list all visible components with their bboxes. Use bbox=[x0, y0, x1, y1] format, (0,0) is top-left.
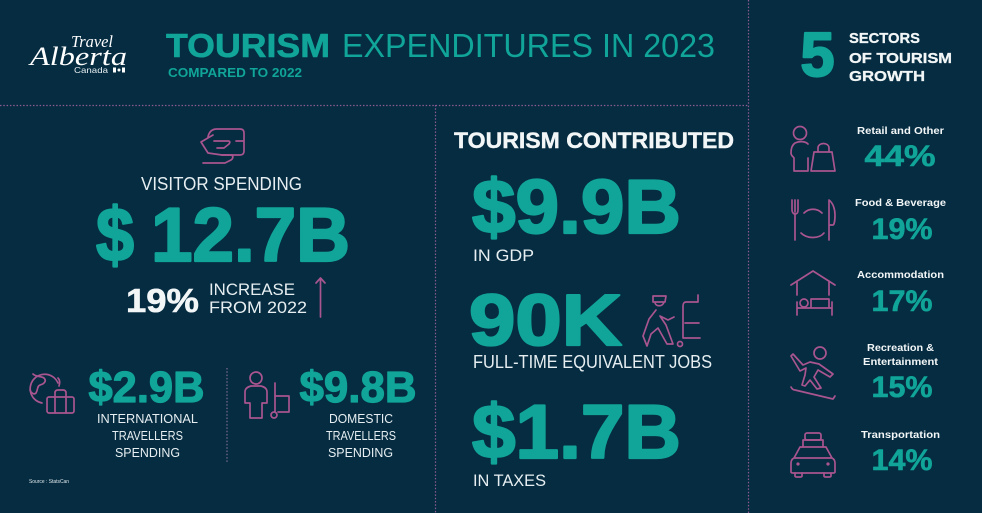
value: 12.7B: 12.7B bbox=[151, 193, 350, 278]
label: jobs: FULL-TIME EQUIVALENT JOBS bbox=[473, 352, 712, 372]
heading: SECTORS bbox=[849, 30, 920, 47]
title: EXPENDITURES IN 2023 bbox=[342, 27, 715, 64]
arrow: up bbox=[316, 278, 325, 317]
label: domestic travellers spending: TRAVELLERS bbox=[326, 428, 396, 443]
panel: domestic travellers bbox=[245, 363, 416, 460]
logo: Travel Alberta Canada: Alberta bbox=[28, 42, 127, 71]
value: 17% bbox=[872, 285, 932, 318]
panel: tourism contributed bbox=[454, 128, 734, 490]
label: Food & Beverage bbox=[855, 198, 946, 209]
heading: OF TOURISM bbox=[849, 50, 952, 67]
sector: recreation bbox=[791, 343, 939, 404]
value: GDP: $9.9B bbox=[472, 165, 681, 250]
value: 9.8B: $9.8B bbox=[300, 363, 416, 412]
sector: food bbox=[792, 198, 946, 246]
label: domestic travellers spending: SPENDING bbox=[328, 445, 393, 460]
label: domestic travellers spending bbox=[326, 411, 396, 460]
label bbox=[863, 343, 939, 368]
value: 19% bbox=[872, 213, 932, 246]
icon: house with bed bbox=[791, 271, 835, 315]
icon: plate and cutlery bbox=[792, 200, 835, 240]
title: COMPARED TO 2022 bbox=[168, 65, 302, 80]
icon: car with luggage bbox=[791, 433, 835, 477]
heading: GROWTH bbox=[849, 68, 925, 85]
logo: Travel Alberta Canada bbox=[28, 32, 127, 75]
icon: snowboarder bbox=[791, 347, 835, 399]
label: Recreation & bbox=[867, 343, 934, 354]
label: domestic travellers spending: DOMESTIC bbox=[329, 411, 393, 426]
stat: 19 percent increase: 19% bbox=[126, 282, 199, 319]
title: TOURISM bbox=[166, 27, 330, 64]
stat: 19 percent increase: INCREASE bbox=[209, 281, 295, 299]
stat: 19 percent increase: FROM 2022 bbox=[209, 299, 307, 317]
label: Accommodation bbox=[857, 270, 944, 281]
label: visitor spending: VISITOR SPENDING bbox=[141, 174, 302, 194]
icon: hand holding card bbox=[201, 129, 244, 163]
panel: visitor spending bbox=[96, 129, 350, 319]
logo: Travel Alberta Canada: Canada bbox=[74, 65, 108, 75]
title bbox=[166, 27, 715, 80]
icon: globe and luggage bbox=[30, 374, 74, 413]
heading: TOURISM CONTRIBUTED bbox=[454, 128, 734, 153]
label: international travellers spending: TRAVELLERS bbox=[112, 428, 183, 443]
icon: shopper bbox=[791, 126, 835, 171]
stat: 19 percent increase bbox=[126, 281, 307, 319]
value: 14% bbox=[872, 444, 932, 477]
label: Retail and Other bbox=[857, 126, 944, 137]
label: in taxes: IN TAXES bbox=[473, 471, 546, 490]
logo: Travel Alberta Canada: Travel bbox=[71, 32, 113, 51]
sector: accommodation bbox=[791, 270, 944, 318]
label: international travellers spending: INTERNATIONAL bbox=[97, 411, 198, 426]
heading bbox=[800, 21, 952, 90]
heading: 5 bbox=[800, 21, 834, 90]
panel: international travellers bbox=[30, 363, 204, 460]
icon: traveller with suitcase bbox=[245, 372, 289, 418]
value: 44% bbox=[864, 140, 936, 173]
sector: transportation bbox=[791, 430, 940, 477]
value: jobs: 90K bbox=[469, 281, 622, 361]
value: 15% bbox=[872, 371, 932, 404]
label: in GDP: IN GDP bbox=[473, 246, 534, 265]
label: international travellers spending: SPENDING bbox=[115, 445, 180, 460]
label: international travellers spending bbox=[97, 411, 198, 460]
label: Entertainment bbox=[863, 357, 939, 368]
label: Transportation bbox=[861, 430, 940, 441]
panel: 5 sectors bbox=[791, 21, 952, 477]
icon: worker with cart bbox=[643, 295, 700, 346]
source note: Source : StatsCan bbox=[29, 479, 69, 485]
value: taxes: $1.7B bbox=[472, 390, 681, 475]
value: 12.7B: $ bbox=[96, 193, 134, 278]
sector: retail bbox=[791, 126, 944, 173]
value: 2.9B: $2.9B bbox=[88, 363, 204, 412]
